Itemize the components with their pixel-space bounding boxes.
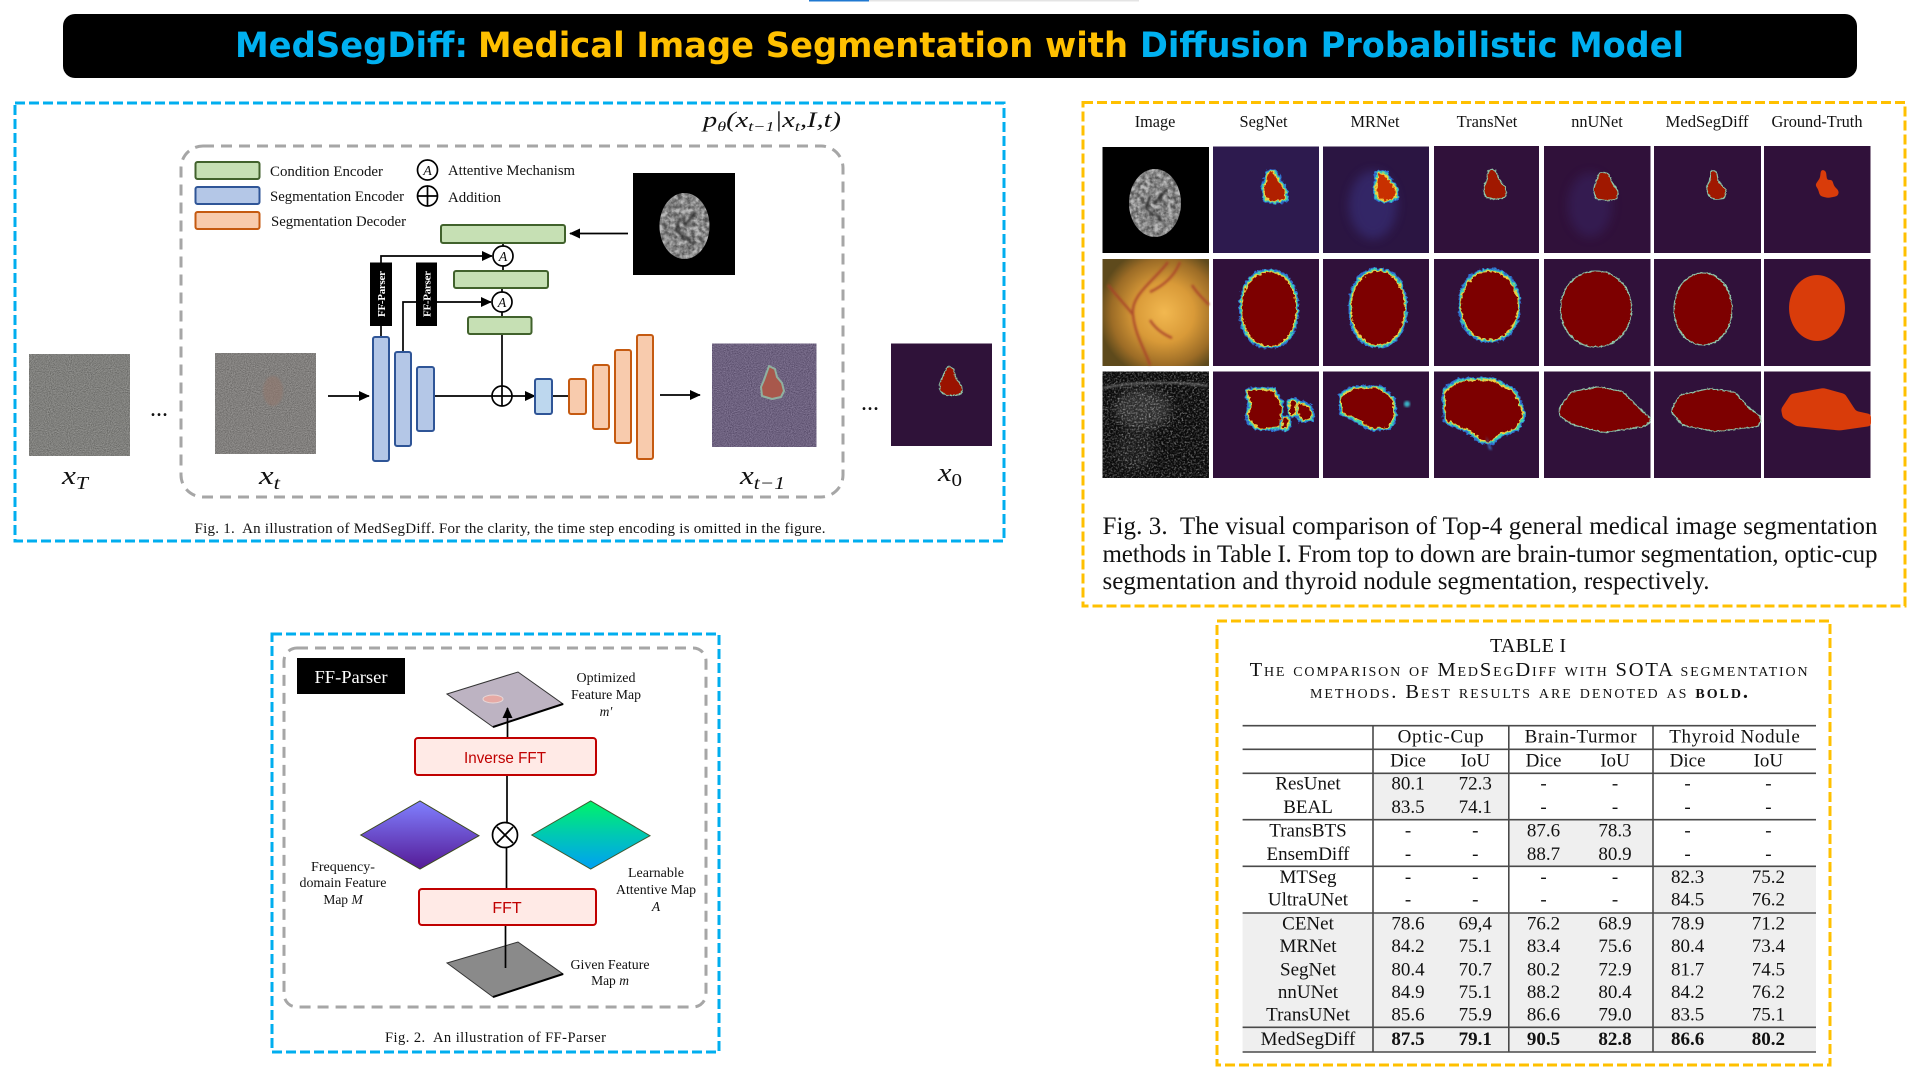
row TransUNet: 83.5 xyxy=(1671,1004,1704,1026)
label: frequency-domain map xyxy=(300,859,386,907)
row MTSeg xyxy=(1280,867,1785,888)
row TransBTS: - xyxy=(1765,820,1772,842)
label: frequency-domain map: Map M xyxy=(323,892,363,907)
legend: Segmentation Decoder xyxy=(271,214,406,230)
row TransUNet: 75.9 xyxy=(1459,1004,1492,1026)
row EnsemDiff: - xyxy=(1765,844,1772,865)
row UltraUNet: 84.5 xyxy=(1671,890,1704,910)
label x_0: 0 xyxy=(951,470,962,490)
given feature map xyxy=(447,942,563,997)
label: learnable attentive map: Attentive Map xyxy=(616,882,696,897)
row ResUnet xyxy=(1275,774,1772,794)
row SegNet: SegNet xyxy=(1280,960,1337,980)
ellipsis right: ... xyxy=(861,390,879,416)
formula: |x xyxy=(774,107,795,132)
addition node xyxy=(492,386,512,406)
row MRNet: 80.4 xyxy=(1671,936,1705,957)
table title: methods. Best results are denoted as bold. xyxy=(1310,681,1748,703)
legend: A xyxy=(422,164,432,179)
header: metrics: IoU xyxy=(1461,750,1490,772)
row nnUNet xyxy=(1278,982,1785,1003)
header: metrics: Dice xyxy=(1670,750,1706,772)
row EnsemDiff: - xyxy=(1472,844,1478,865)
row SegNet: 70.7 xyxy=(1459,960,1492,980)
row MRNet xyxy=(1280,936,1786,957)
FFT box: FFT xyxy=(492,900,522,917)
label: given feature map xyxy=(570,957,650,988)
row UltraUNet: - xyxy=(1472,890,1478,910)
caption Fig. 1: Fig. 1. An illustration of MedSegDiff. For the clarity, the time step encoding is omitted in the figure. xyxy=(194,521,826,537)
row BEAL: - xyxy=(1684,797,1691,818)
row MTSeg: 75.2 xyxy=(1752,867,1785,888)
label: given feature map: Map m xyxy=(591,973,629,988)
label x_T: x xyxy=(62,461,74,490)
row MedSegDiff xyxy=(1261,1029,1785,1050)
row CENet: 69,4 xyxy=(1459,914,1492,934)
FF-Parser blocks: FF-Parser xyxy=(422,271,434,317)
row SegNet: 72.9 xyxy=(1598,960,1632,980)
label x_0: x xyxy=(938,458,950,487)
connectors xyxy=(328,234,700,396)
header: metrics xyxy=(1390,750,1783,772)
header: metrics: IoU xyxy=(1754,750,1783,772)
column headers: MedSegDiff xyxy=(1666,112,1749,131)
header: metrics: IoU xyxy=(1600,750,1630,772)
row MRNet: 84.2 xyxy=(1391,936,1425,957)
title banner: Medical Image Segmentation with xyxy=(478,26,1128,66)
row MedSegDiff: 87.5 xyxy=(1391,1029,1425,1050)
attentive mechanism nodes: A xyxy=(497,296,507,311)
row EnsemDiff: EnsemDiff xyxy=(1266,844,1350,865)
label x_t-1: t−1 xyxy=(754,473,785,493)
label: learnable attentive map: Learnable xyxy=(628,865,684,880)
header: metrics: Dice xyxy=(1390,750,1426,772)
column headers: Ground-Truth xyxy=(1772,112,1863,131)
row ResUnet: ResUnet xyxy=(1275,774,1341,794)
row CENet: 68.9 xyxy=(1598,914,1632,934)
condition image: brain MRI xyxy=(633,173,735,275)
FF-Parser blocks: FF-Parser xyxy=(376,271,388,317)
row BEAL: - xyxy=(1612,797,1618,818)
row SegNet: 81.7 xyxy=(1671,960,1704,980)
row TransUNet: TransUNet xyxy=(1266,1004,1351,1026)
title banner: MedSegDiff: xyxy=(235,26,468,66)
caption Fig. 3: segmentation and thyroid nodule segmentation, respectively. xyxy=(1102,568,1710,595)
column headers: nnUNet xyxy=(1571,112,1623,131)
row MedSegDiff: 82.8 xyxy=(1598,1029,1632,1050)
row TransBTS: TransBTS xyxy=(1269,820,1347,842)
row CENet: 78.9 xyxy=(1671,914,1704,934)
column headers: TransNet xyxy=(1457,112,1518,131)
formula: (x xyxy=(726,107,749,132)
column headers: SegNet xyxy=(1240,112,1288,131)
header: groups: Brain-Turmor xyxy=(1525,726,1637,748)
row MTSeg: MTSeg xyxy=(1280,867,1337,888)
panel: MedSegDiff architecture (Fig. 1) xyxy=(15,103,1004,541)
row MRNet: 75.6 xyxy=(1598,936,1632,957)
formula: ,I,t) xyxy=(800,107,841,132)
image: x_0 output xyxy=(891,344,992,446)
row UltraUNet xyxy=(1268,890,1785,910)
row nnUNet: 88.2 xyxy=(1527,982,1560,1003)
row MRNet: 83.4 xyxy=(1527,936,1561,957)
legend: Condition Encoder xyxy=(270,164,383,180)
header: groups xyxy=(1398,726,1800,748)
learnable attentive map diamond xyxy=(532,801,650,869)
label: given feature map: Given Feature xyxy=(570,957,650,972)
FF-Parser title tag xyxy=(297,658,405,694)
row UltraUNet: - xyxy=(1540,890,1547,910)
row TransUNet xyxy=(1266,1004,1785,1026)
label: learnable attentive map xyxy=(616,865,696,914)
image: x_T noise xyxy=(29,354,130,456)
optimized feature map xyxy=(447,672,563,727)
formula: t xyxy=(795,120,801,135)
label: frequency-domain map: Frequency- xyxy=(311,859,376,874)
FF-Parser blocks xyxy=(370,262,437,326)
row BEAL: 74.1 xyxy=(1459,797,1492,818)
column headers: MRNet xyxy=(1350,112,1400,131)
attentive mechanism nodes: A xyxy=(498,250,508,265)
row TransBTS: - xyxy=(1472,820,1478,842)
caption Fig. 3 xyxy=(1102,513,1878,595)
row nnUNet: 80.4 xyxy=(1598,982,1632,1003)
label: optimized feature map: Feature Map xyxy=(571,687,641,702)
row nnUNet: 84.2 xyxy=(1671,982,1704,1003)
table title xyxy=(1250,635,1808,703)
row EnsemDiff: - xyxy=(1405,844,1411,865)
ellipsis left: ... xyxy=(150,396,168,422)
Inverse FFT box xyxy=(415,738,596,775)
row BEAL: - xyxy=(1765,797,1772,818)
row ResUnet: - xyxy=(1612,774,1618,794)
row MedSegDiff: 80.2 xyxy=(1752,1029,1785,1050)
FF-Parser title tag: FF-Parser xyxy=(314,667,388,687)
row SegNet: 80.2 xyxy=(1527,960,1560,980)
flow lines xyxy=(506,708,508,968)
panel: results table (Table I) xyxy=(1217,621,1830,1065)
label x_T: T xyxy=(76,473,90,493)
row EnsemDiff: - xyxy=(1684,844,1691,865)
legend: Attentive Mechanism xyxy=(448,163,576,179)
row UltraUNet: 76.2 xyxy=(1752,890,1785,910)
row ResUnet: - xyxy=(1684,774,1691,794)
header: groups: Thyroid Nodule xyxy=(1669,726,1800,748)
header: groups: Optic-Cup xyxy=(1398,726,1484,748)
row nnUNet: nnUNet xyxy=(1278,982,1339,1003)
caption Fig. 3: methods in Table I. From top to down are brain-tumor segmentation, optic-cup xyxy=(1102,541,1878,568)
title banner xyxy=(63,14,1857,78)
row TransUNet: 75.1 xyxy=(1752,1004,1785,1026)
frequency-domain map diamond xyxy=(361,801,479,869)
row nnUNet: 76.2 xyxy=(1752,982,1785,1003)
row MedSegDiff: 90.5 xyxy=(1527,1029,1560,1050)
row: optic cup xyxy=(1102,259,1870,366)
row: brain tumor xyxy=(1102,146,1870,253)
row MTSeg: - xyxy=(1472,867,1478,888)
row TransBTS: - xyxy=(1405,820,1411,842)
row BEAL xyxy=(1283,797,1772,818)
label: frequency-domain map: domain Feature xyxy=(300,875,386,890)
label: optimized feature map: m′ xyxy=(600,704,613,719)
label: optimized feature map xyxy=(571,670,641,719)
panel: visual comparison (Fig. 3) xyxy=(1083,102,1905,606)
label: optimized feature map: Optimized xyxy=(576,670,636,685)
legend: Segmentation Encoder xyxy=(270,189,404,205)
title banner: Diffusion Probabilistic Model xyxy=(1140,26,1684,66)
row MRNet: 73.4 xyxy=(1752,936,1786,957)
row ResUnet: 80.1 xyxy=(1391,774,1425,794)
table highlighted cells xyxy=(1243,773,1816,1052)
table data xyxy=(1261,726,1800,1050)
row BEAL: 83.5 xyxy=(1391,797,1425,818)
row MRNet: 75.1 xyxy=(1459,936,1492,957)
image: x_t noisy xyxy=(215,353,316,454)
row TransBTS: 87.6 xyxy=(1527,820,1560,842)
table title: TABLE I xyxy=(1490,635,1566,657)
label x_t-1: x xyxy=(740,461,752,490)
row CENet: 71.2 xyxy=(1752,914,1785,934)
row MTSeg: - xyxy=(1612,867,1618,888)
label: learnable attentive map: A xyxy=(651,899,661,914)
row EnsemDiff: 88.7 xyxy=(1527,844,1560,865)
row TransUNet: 79.0 xyxy=(1598,1004,1632,1026)
column headers: Image xyxy=(1135,112,1175,131)
column headers xyxy=(1135,112,1863,131)
legend xyxy=(196,160,576,230)
row CENet: 76.2 xyxy=(1527,914,1560,934)
row BEAL: BEAL xyxy=(1283,797,1333,818)
row TransBTS: - xyxy=(1684,820,1691,842)
segmentation decoder blocks xyxy=(569,335,653,459)
table title: The comparison of MedSegDiff with SOTA segmentation xyxy=(1250,659,1808,681)
row MRNet: MRNet xyxy=(1280,936,1337,957)
legend: Addition xyxy=(448,190,502,206)
table rules xyxy=(1243,726,1816,1052)
row SegNet: 80.4 xyxy=(1391,960,1425,980)
formula: θ xyxy=(717,120,726,135)
Inverse FFT box: Inverse FFT xyxy=(464,750,546,767)
label x_t: x xyxy=(259,461,271,490)
row EnsemDiff: 80.9 xyxy=(1598,844,1632,865)
row nnUNet: 75.1 xyxy=(1459,982,1492,1003)
bottleneck block xyxy=(535,379,552,414)
condition encoder blocks xyxy=(441,225,565,334)
row MedSegDiff: 86.6 xyxy=(1671,1029,1704,1050)
formula: p xyxy=(703,107,714,132)
row ResUnet: 72.3 xyxy=(1459,774,1492,794)
row UltraUNet: - xyxy=(1405,890,1411,910)
row EnsemDiff xyxy=(1266,844,1772,865)
caption Fig. 3: Fig. 3. The visual comparison of Top-4 general medical image segmentation xyxy=(1102,513,1878,540)
row TransUNet: 85.6 xyxy=(1391,1004,1425,1026)
row SegNet: 74.5 xyxy=(1752,960,1785,980)
row SegNet xyxy=(1280,960,1785,980)
row ResUnet: - xyxy=(1765,774,1772,794)
top tab strip xyxy=(809,0,1139,2)
FFT box xyxy=(419,889,596,925)
row CENet: CENet xyxy=(1282,914,1335,934)
row TransBTS xyxy=(1269,820,1772,842)
row TransBTS: 78.3 xyxy=(1598,820,1632,842)
row BEAL: - xyxy=(1540,797,1547,818)
row ResUnet: - xyxy=(1540,774,1547,794)
caption Fig. 2: Fig. 2. An illustration of FF-Parser xyxy=(385,1030,606,1046)
header: metrics: Dice xyxy=(1526,750,1561,772)
row MedSegDiff: MedSegDiff xyxy=(1261,1029,1356,1050)
row UltraUNet: UltraUNet xyxy=(1268,890,1349,910)
row nnUNet: 84.9 xyxy=(1391,982,1425,1003)
row MedSegDiff: 79.1 xyxy=(1459,1029,1492,1050)
row MTSeg: - xyxy=(1405,867,1411,888)
panel: FF-Parser (Fig. 2) xyxy=(272,634,719,1052)
segmentation encoder blocks xyxy=(373,337,434,461)
row CENet xyxy=(1282,914,1785,934)
attentive mechanism nodes xyxy=(492,246,513,312)
multiply node xyxy=(492,822,518,848)
row: thyroid nodule xyxy=(1102,372,1871,478)
row MTSeg: - xyxy=(1540,867,1547,888)
label x_t: t xyxy=(274,473,281,493)
row MTSeg: 82.3 xyxy=(1671,867,1704,888)
row CENet: 78.6 xyxy=(1391,914,1425,934)
row TransUNet: 86.6 xyxy=(1527,1004,1560,1026)
image: x_t-1 xyxy=(712,344,816,447)
row UltraUNet: - xyxy=(1612,890,1618,910)
formula: t−1 xyxy=(748,120,774,135)
